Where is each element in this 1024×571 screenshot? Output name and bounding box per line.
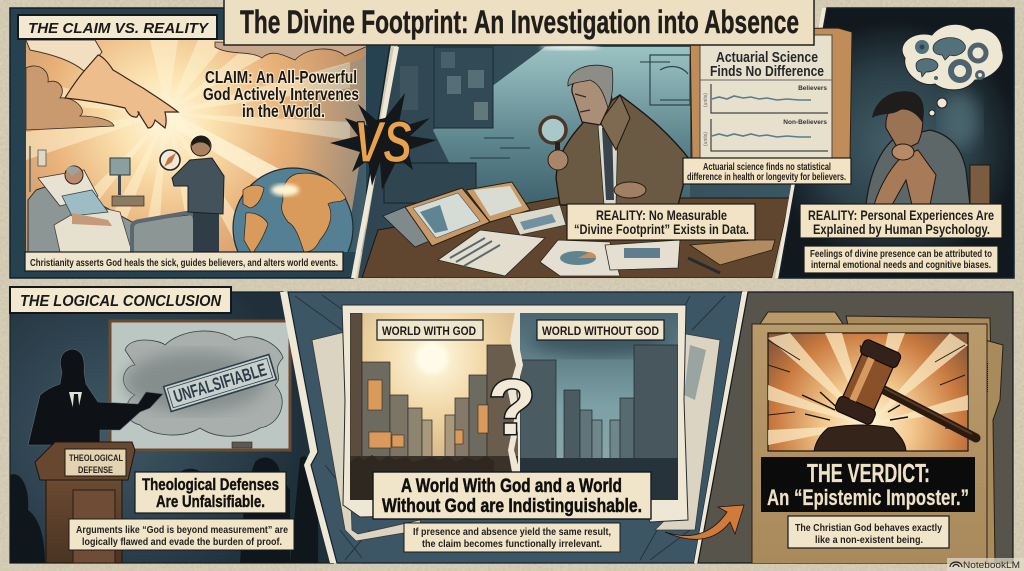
IV and monitor [110,158,130,175]
indistinguishable heading: A World With God and a World [401,475,622,497]
section label: the claim vs. reality [18,15,217,39]
indistinguishable caption: the claim becomes functionally irrelevant. [422,538,602,550]
torn photo frame [342,305,688,522]
panel: theological defense [10,292,333,563]
podium [35,442,135,480]
torn centre strip [508,312,523,472]
line chart: believers: Believers [798,85,827,92]
reality heading: data: REALITY: No Measurable [596,207,727,223]
title [224,0,814,45]
sleeve [26,40,102,72]
line chart: non-believers: Non-Believers [783,119,827,126]
wall map [650,55,690,105]
world with God label: WORLD WITH GOD [382,324,476,338]
evidence board [434,47,493,128]
claim caption: Christianity asserts God heals the sick, guides believers, and alters world events. [30,257,338,269]
back desk [384,163,476,203]
panel: two worlds [288,292,742,563]
line chart: believers: (units) [703,93,709,107]
patient [65,166,83,184]
panel: reality, data [358,44,825,278]
hand [65,55,178,128]
reality heading: psychology [800,204,1002,238]
indistinguishable heading: Without God are Indistinguishable. [382,495,642,517]
VS burst: VS [354,110,412,175]
claim heading [203,67,359,121]
claim heading: God Actively Intervenes [203,84,359,104]
person with compass [193,210,219,252]
whiteboard with unfalsifiable cloud [110,321,290,450]
bed rail [132,213,195,252]
manila folder [752,312,1003,564]
verdict caption [788,516,949,548]
podium label: DEFENSE [78,465,113,476]
globe [232,167,354,252]
folder heading: Actuarial Science [716,49,818,66]
psychology caption [804,246,998,273]
detective coat [556,95,690,205]
NotebookLM watermark: NotebookLM [963,560,1020,571]
panel: claim [10,8,396,288]
illustration: divine light over the world [26,40,366,252]
line chart: believers [703,84,828,113]
actuarial caption [683,158,851,184]
paper stack [383,207,432,247]
theological caption: Arguments like “God is beyond measurement” are [76,524,288,536]
brick lines [470,62,690,158]
verdict caption: like a non-existent being. [815,534,923,546]
theological defenses heading: Are Unfalsifiable. [156,493,265,511]
sound block [814,425,906,451]
stamp: UNFALSIFIABLE [171,359,269,407]
world without God label [537,320,664,340]
verdict banner [761,457,975,512]
world with God label [377,320,483,340]
stamp [164,354,276,412]
claim heading: in the World. [242,101,325,121]
reality heading: data [567,204,755,240]
white panel divider [694,292,748,563]
section label: the logical conclusion [10,287,231,313]
NotebookLM watermark [947,558,1024,571]
indistinguishable caption [404,523,620,552]
folder heading [710,49,824,80]
claim heading: CLAIM: An All-Powerful [205,67,357,87]
detective scene [362,44,790,278]
line chart: non-believers [703,119,828,151]
person in prayer [866,91,990,210]
actuarial science folder [683,28,852,184]
speaker silhouette [28,349,163,445]
table [362,198,790,278]
bed [28,182,196,252]
background papers [312,332,720,541]
verdict caption: The Christian God behaves exactly [795,522,942,534]
theological defenses heading: Theological Defenses [142,476,279,494]
hand and magnifier [540,117,566,143]
claim caption [25,252,343,271]
actuarial caption: Actuarial science finds no statistical [703,162,831,173]
evidence folders [405,188,490,246]
title: The Divine Footprint: An Investigation into Absence [240,4,799,40]
speed lines [295,295,725,560]
world with God scene [350,313,520,501]
podium label [65,449,126,476]
VS burst [330,93,437,190]
panel: the verdict [698,292,1013,564]
lamp [540,44,600,50]
section label: the claim vs. reality: THE CLAIM VS. REALITY [28,20,210,37]
question mark: ? [488,363,536,451]
line chart: non-believers: (units) [703,132,709,146]
indistinguishable caption: If presence and absence yield the same result, [413,526,611,538]
panel: reality, psychology [775,8,1014,278]
audience silhouettes [10,456,318,563]
reality heading: data: “Divine Footprint” Exists in Data. [574,221,749,237]
white panel divider [351,47,399,278]
gavel illustration [768,333,976,451]
world without God label: WORLD WITHOUT GOD [542,324,659,338]
folder heading: Finds No Difference [710,63,824,80]
theological caption: logically flawed and evade the burden of proof. [82,536,282,548]
world without God scene [520,313,680,500]
podium label: THEOLOGICAL [69,453,123,464]
thought bubble with gears [902,24,1003,116]
white panel divider [280,292,338,563]
theological caption [69,519,294,550]
theological defenses heading [135,472,286,513]
section label: the logical conclusion: THE LOGICAL CONCLUSION [20,293,221,310]
actuarial caption: difference in health or longevity for believers. [687,172,846,183]
clouds [26,42,370,130]
arrow to verdict [665,505,744,539]
detective head [571,80,612,126]
verdict banner: THE VERDICT: [807,458,930,488]
indistinguishable heading [373,472,651,519]
